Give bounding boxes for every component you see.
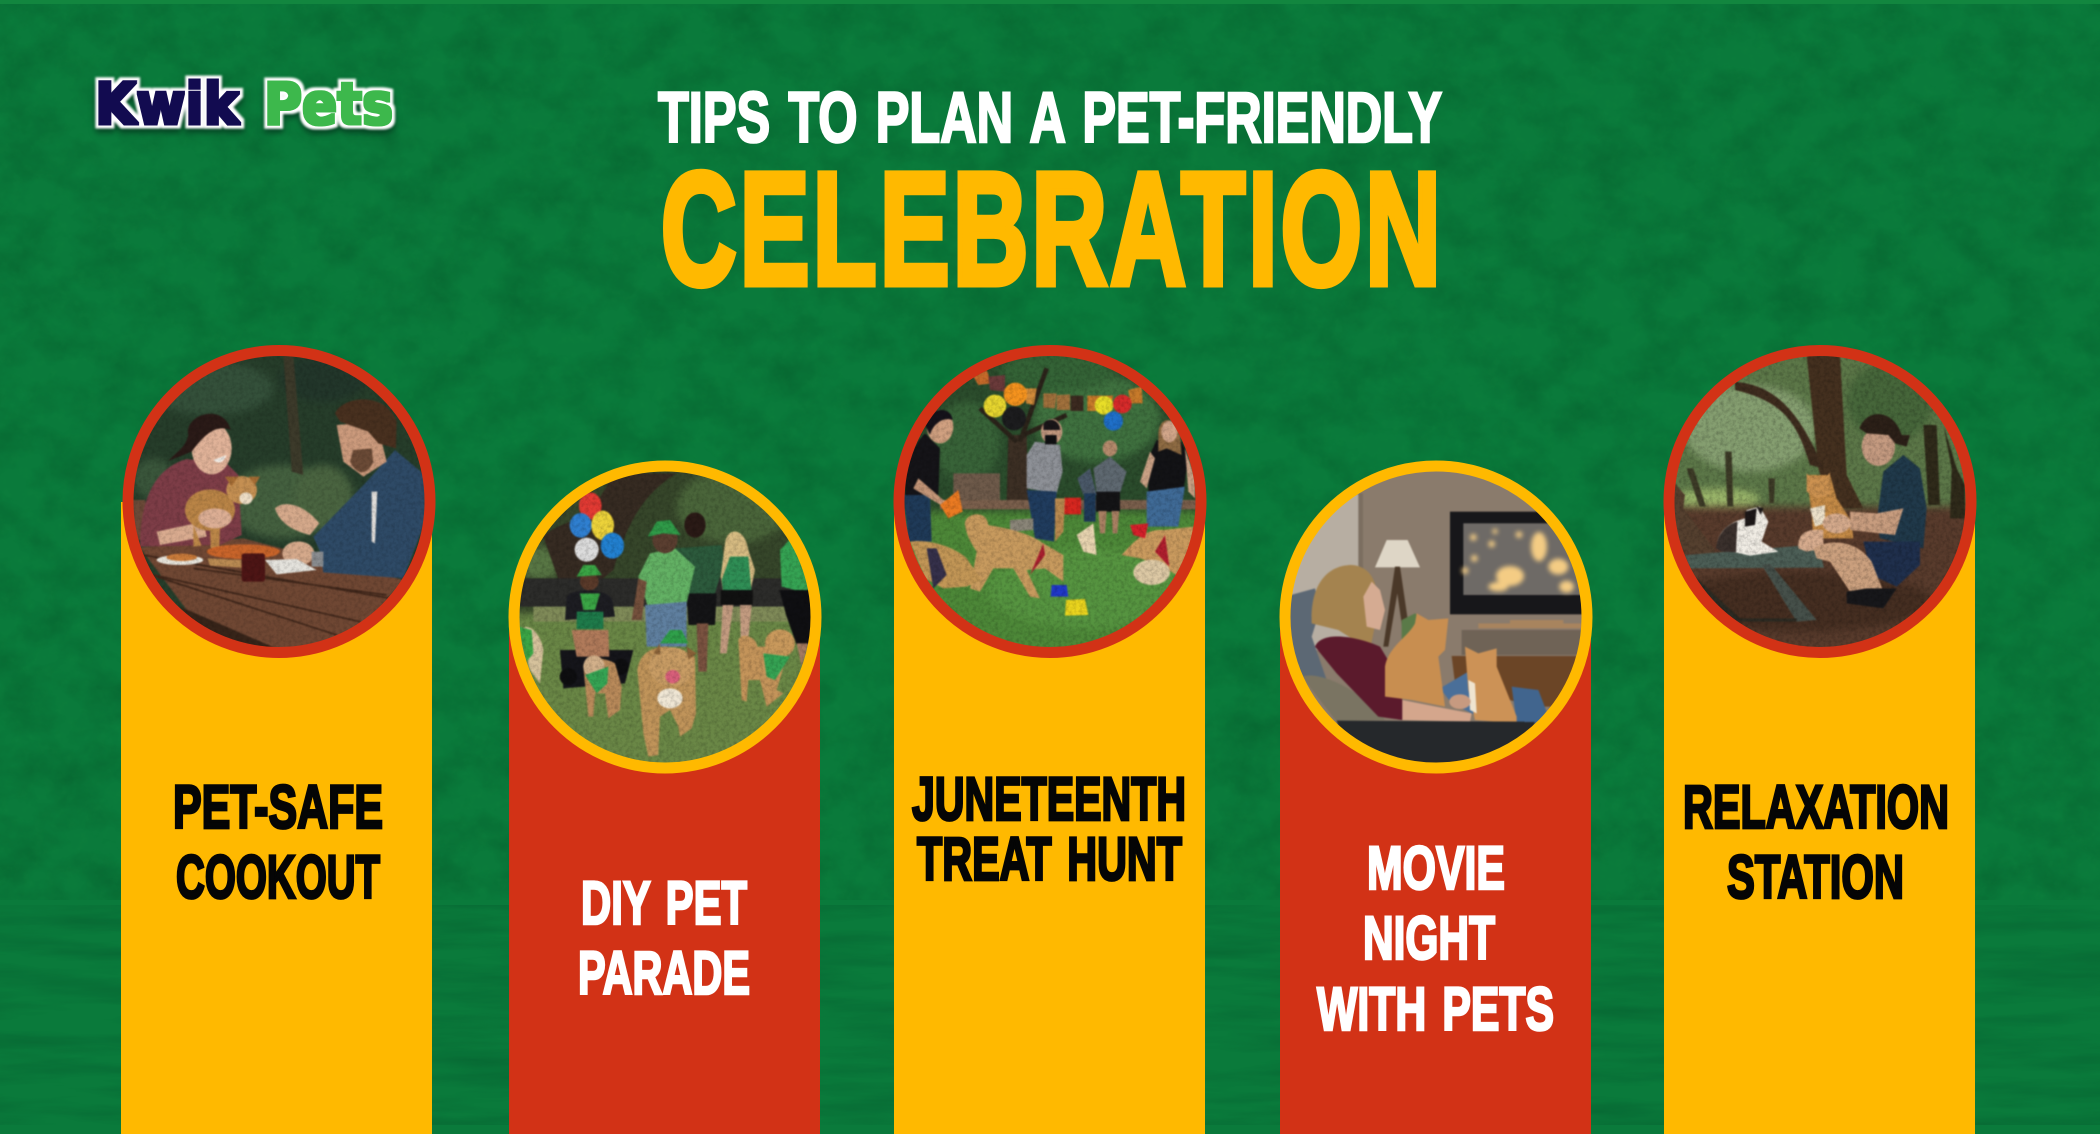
photo: woman and pets at cot in forest (1674, 356, 1966, 647)
panel: pet-safe cookout (110, 335, 450, 1134)
panel: movie night with pets (1265, 450, 1605, 1134)
photo ring (128, 350, 430, 652)
label: PET-SAFE (173, 773, 383, 841)
red column (509, 617, 820, 1134)
red column (1280, 617, 1591, 1134)
label: STATION (1727, 843, 1904, 911)
label: MOVIE (1367, 834, 1505, 902)
panel: relaxation station (1650, 335, 1990, 1134)
title line 1: TIPS TO PLAN A PET-FRIENDLY (658, 79, 1442, 158)
label (912, 765, 1186, 893)
logo: Kwik Pets: Pets (264, 70, 393, 138)
photo ring (899, 350, 1201, 652)
sub-layer: fire on TV (1462, 529, 1574, 593)
yellow column (1664, 502, 1975, 1134)
logo: Kwik Pets (95, 70, 393, 138)
label (1683, 773, 1949, 911)
label: TREAT HUNT (917, 825, 1182, 893)
logo: Kwik Pets: Kwik (95, 70, 240, 138)
yellow column (894, 502, 1205, 1134)
title (658, 79, 1444, 318)
photo ring (1285, 466, 1587, 768)
label: WITH PETS (1317, 975, 1554, 1043)
label (578, 869, 750, 1007)
label: RELAXATION (1683, 773, 1949, 841)
label (1317, 834, 1554, 1043)
label: NIGHT (1363, 904, 1495, 972)
photo ring (1669, 350, 1971, 652)
yellow column (121, 502, 432, 1134)
label: JUNETEENTH (912, 765, 1186, 833)
label: PARADE (578, 939, 750, 1007)
title line 2: celebration: CELEBRATION (661, 139, 1444, 318)
label: COOKOUT (176, 843, 380, 911)
photo ring (514, 466, 816, 768)
photo: parade with dogs and balloons (520, 472, 810, 762)
photo: woman and cats watching TV (1290, 472, 1582, 762)
photo: dogs sniffing cups on grass (904, 356, 1196, 647)
photo: couple and dog at picnic table (134, 356, 424, 647)
panel: Juneteenth treat hunt (880, 335, 1220, 1134)
panel: DIY pet parade (500, 450, 840, 1134)
label: DIY PET (581, 869, 747, 937)
label (173, 773, 383, 911)
